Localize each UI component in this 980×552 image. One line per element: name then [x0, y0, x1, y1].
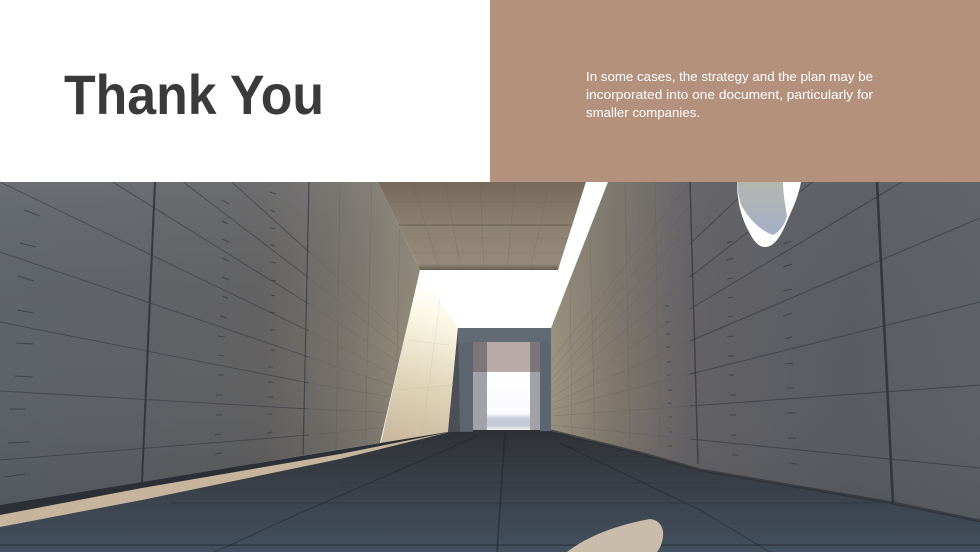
title: Thank You: Thank You: [64, 63, 324, 126]
left concrete wall: [0, 182, 420, 505]
white title panel: [0, 0, 490, 182]
body text: smaller companies.: [586, 106, 700, 120]
right concrete wall: [551, 182, 980, 521]
body text: [586, 70, 873, 120]
sunlight patch on floor: [567, 519, 663, 552]
sunlight strip on floor: [0, 432, 450, 527]
end wall and doorway: [448, 328, 551, 432]
sunlit side wall: [381, 270, 458, 443]
floor: [0, 431, 980, 552]
ceiling slab: [378, 182, 586, 270]
oval skylight in right wall: [737, 182, 801, 247]
skylight opening: [420, 182, 608, 328]
brown text panel: [490, 0, 980, 182]
body text: incorporated into one document, particularly for: [586, 88, 873, 102]
body text: In some cases, the strategy and the plan may be: [586, 70, 873, 84]
